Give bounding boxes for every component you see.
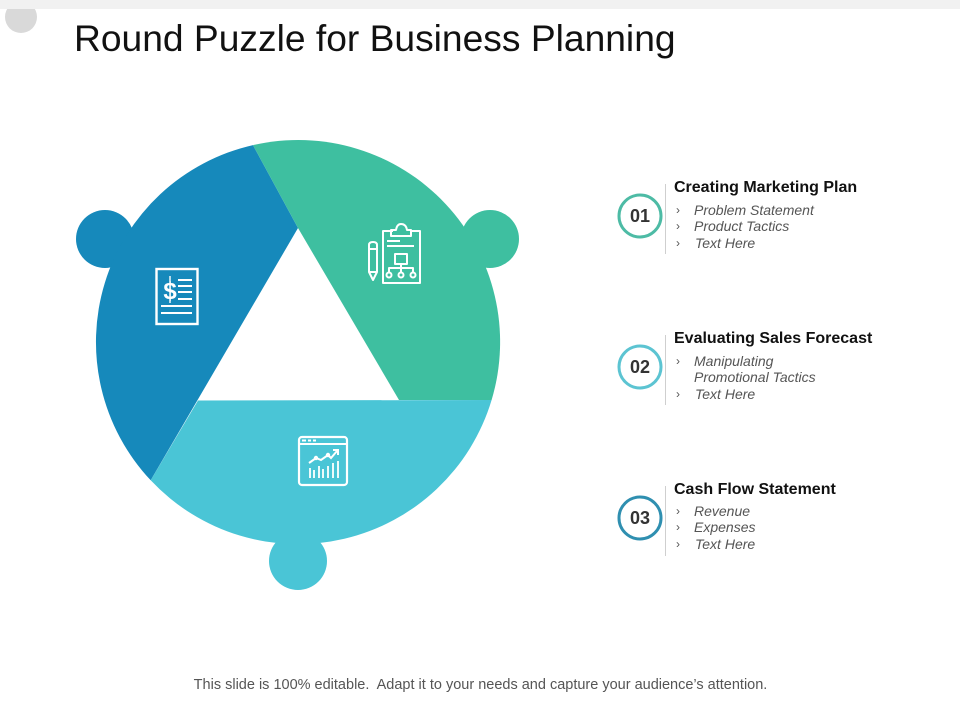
segment: green xyxy=(253,140,519,400)
list 01: › xyxy=(676,236,680,250)
list 02: › xyxy=(676,387,680,401)
divider xyxy=(665,335,666,405)
divider xyxy=(665,184,666,254)
footer note: This slide is 100% editable. Adapt it to your needs and capture your audience’s attention. xyxy=(194,677,767,693)
icon: clipboard with org chart and pencil xyxy=(369,224,420,283)
list 01: Problem Statement xyxy=(694,202,815,218)
list 01 xyxy=(676,202,815,251)
badge 01: 01 xyxy=(630,206,650,226)
heading 02: Evaluating Sales Forecast xyxy=(674,330,873,347)
list 02: Manipulating xyxy=(694,353,774,369)
list 01: › xyxy=(676,203,680,217)
list 03: Text Here xyxy=(695,536,755,552)
list 03: › xyxy=(676,537,680,551)
title: Round Puzzle for Business Planning xyxy=(74,17,676,59)
list 01: › xyxy=(676,219,680,233)
list 01: Text Here xyxy=(695,235,755,251)
icon: dollar document: $ xyxy=(163,278,177,305)
corner circle xyxy=(5,1,37,33)
round puzzle diagram xyxy=(76,140,519,590)
list 03: Revenue xyxy=(694,503,750,519)
badge 03 xyxy=(619,497,661,539)
list 01: Product Tactics xyxy=(694,218,789,234)
top bar xyxy=(0,0,960,9)
list 02: Promotional Tactics xyxy=(694,369,816,385)
segment: blue xyxy=(76,145,298,480)
badge 03: 03 xyxy=(630,508,650,528)
heading 03: Cash Flow Statement xyxy=(674,481,836,498)
heading 01: Creating Marketing Plan xyxy=(674,179,857,196)
list 03: Expenses xyxy=(694,519,755,535)
list 02: Text Here xyxy=(695,386,755,402)
badge 01 xyxy=(619,195,661,237)
icon: dollar document xyxy=(156,269,198,324)
item 01 xyxy=(619,179,857,254)
list 03 xyxy=(676,503,755,552)
segment: teal xyxy=(151,400,492,590)
divider xyxy=(665,486,666,556)
list 03: › xyxy=(676,520,680,534)
badge 02 xyxy=(619,346,661,388)
badge 02: 02 xyxy=(630,357,650,377)
item 02 xyxy=(619,330,873,405)
list 02: › xyxy=(676,354,680,368)
icon: browser window with chart xyxy=(299,437,347,485)
list 02 xyxy=(676,353,816,402)
list 03: › xyxy=(676,504,680,518)
item 03 xyxy=(619,481,836,556)
